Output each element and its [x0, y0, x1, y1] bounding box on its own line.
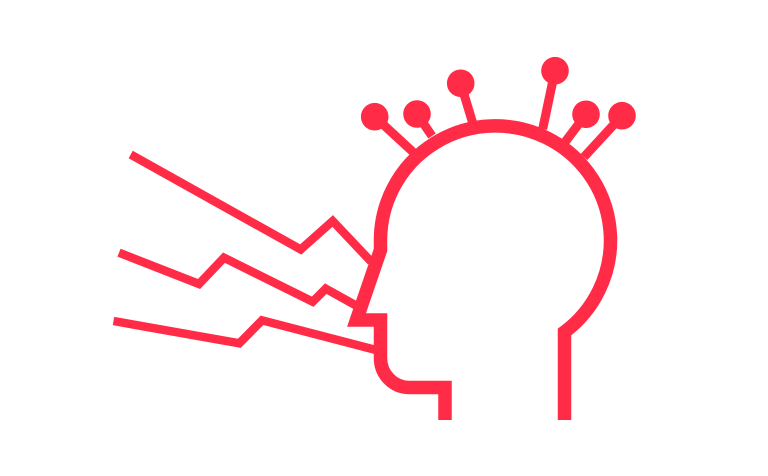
- incoming jagged lines: [114, 154, 376, 350]
- spike 6: [584, 102, 636, 157]
- line: middle: [119, 253, 356, 306]
- spike 4: [541, 57, 569, 129]
- spikes on head: [361, 57, 636, 157]
- line: top: [131, 154, 371, 262]
- spike 3: [447, 70, 475, 124]
- line: bottom: [114, 320, 376, 350]
- head outline: [356, 126, 610, 420]
- spike 1: [361, 103, 413, 152]
- spike 2: [403, 100, 432, 136]
- spike 5: [566, 100, 600, 142]
